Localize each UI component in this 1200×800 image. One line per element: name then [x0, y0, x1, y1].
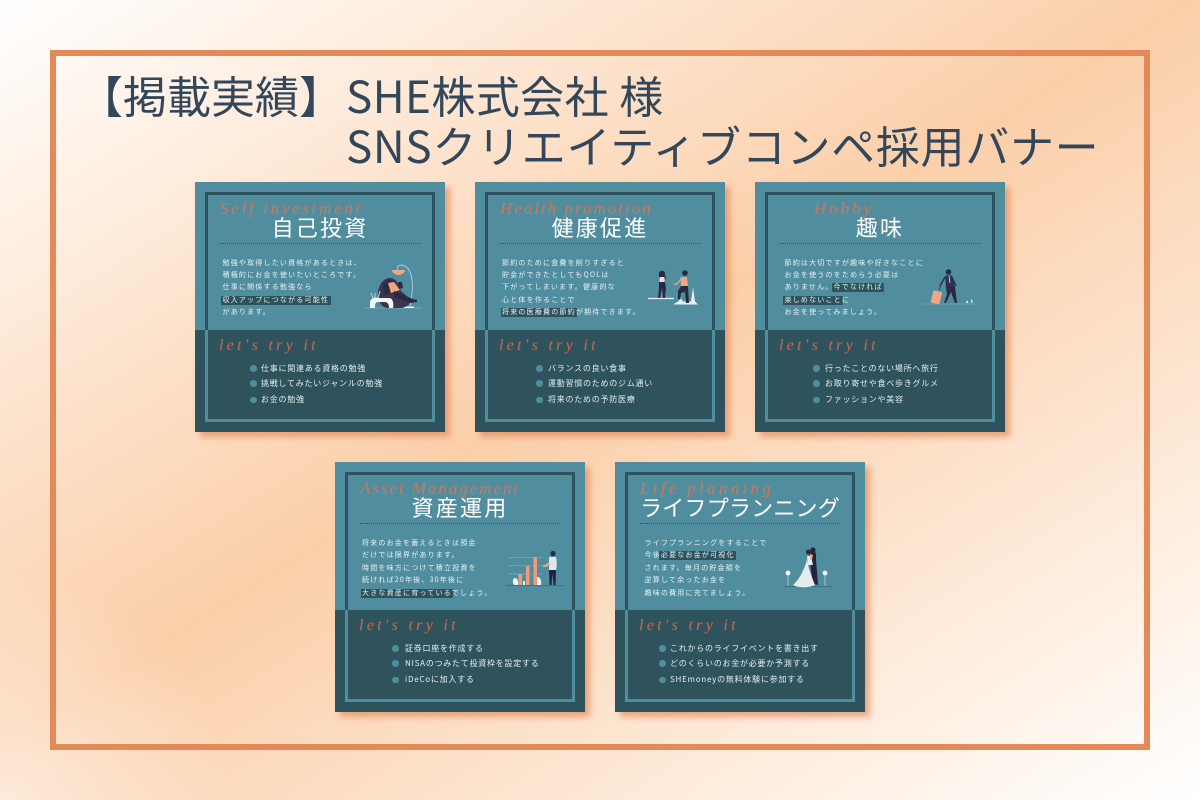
icon: two people exercising — [648, 270, 698, 304]
panel: health promotion — [475, 182, 725, 432]
icon: wedding couple — [785, 547, 832, 588]
body text — [644, 538, 767, 598]
panel: life planning — [615, 462, 865, 712]
panel: life planning: SHEmoneyの無料体験に参加する — [670, 674, 805, 685]
body text: お金を使うのをためらう必要は — [784, 270, 899, 280]
body text: 節約は大切ですが趣味や好きなことに — [784, 258, 924, 268]
body text: 貯金ができたとしてもQOLは — [502, 270, 609, 280]
body text: に — [842, 295, 850, 305]
panel: hobby: ファッションや美容 — [825, 394, 904, 405]
panel: life planning: これからのライフイベントを書き出す — [670, 642, 819, 654]
script: let's try it: let's try it — [779, 337, 879, 354]
checklist — [392, 642, 540, 685]
panel: health promotion: バランスの良い食事 — [548, 362, 627, 374]
body text: 心と体を作ることで — [502, 295, 576, 305]
body text: 収入アップにつながる可能性 — [222, 295, 329, 305]
body text: 仕事に関係する勉強なら — [222, 282, 313, 292]
checklist — [659, 642, 819, 685]
body text — [361, 538, 492, 598]
body text: 将来のお金を蓄えるときは預金 — [362, 538, 477, 548]
body text: ライフプランニングをすることで — [644, 538, 767, 548]
body text: されます。毎月の貯金額を — [644, 563, 742, 573]
heading: 資産運用 — [412, 491, 508, 523]
body text: があります。 — [222, 307, 271, 317]
body text: 大きな資産に育っている — [362, 588, 452, 598]
body text: 必要なお金が可視化 — [661, 550, 735, 560]
panel: asset management: 証券口座を作成する — [405, 642, 484, 654]
panel: self investment: 挑戦してみたいジャンルの勉強 — [261, 378, 383, 389]
panel: health promotion: 将来のための予防医療 — [548, 394, 636, 405]
panel: health promotion: 運動習慣のためのジム通い — [548, 378, 653, 389]
checklist — [813, 362, 939, 405]
script subtitle: Asset Management — [360, 479, 520, 498]
heading: 趣味 — [856, 211, 904, 243]
body text: 下がってしまいます。健康的な — [502, 282, 616, 292]
script subtitle: Hobby — [814, 199, 874, 218]
script subtitle: Health promotion — [500, 199, 653, 218]
body text: 勉強や取得したい資格があるときは、 — [222, 258, 362, 268]
body text — [221, 258, 362, 317]
panel: hobby: 行ったことのない場所へ旅行 — [825, 362, 939, 374]
script: let's try it: let's try it — [359, 617, 459, 634]
heading: 自己投資 — [272, 211, 368, 243]
panel: self investment: お金の勉強 — [261, 394, 305, 405]
icon: traveller with suitcase — [922, 269, 978, 304]
checklist — [536, 362, 653, 405]
body text: が期待できます。 — [576, 307, 641, 317]
body text: 続ければ20年後、30年後に — [362, 575, 464, 585]
title line 1: 【掲載実績】 — [79, 62, 343, 126]
script: let's try it: let's try it — [639, 617, 739, 634]
body text: 今後 — [644, 550, 661, 560]
panel: self investment — [195, 182, 445, 432]
body text: 今でなければ — [834, 282, 883, 292]
panel: asset management — [335, 462, 585, 712]
title line 3: banner description: SNSクリエイティブコンペ採用バナー — [346, 112, 1099, 176]
icon: bar chart with person — [506, 550, 564, 586]
panel: life planning: どのくらいのお金が必要か予測する — [670, 658, 810, 669]
body text: 将来の医療費の節約 — [502, 307, 576, 317]
body text: 楽しめないこと — [784, 295, 842, 305]
body text: 趣味の費用に充てましょう。 — [644, 588, 750, 598]
script: let's try it: let's try it — [499, 337, 599, 354]
script subtitle: Life planning — [640, 479, 774, 498]
panel: self investment: 仕事に関連ある資格の勉強 — [261, 362, 366, 374]
body text: 積極的にお金を使いたいところです。 — [222, 270, 361, 280]
script: let's try it: let's try it — [219, 337, 319, 354]
panel: hobby: お取り寄せや食べ歩きグルメ — [825, 378, 939, 389]
body text: でしょう。 — [452, 588, 492, 598]
title line 2: client name: SHE株式会社 様 — [346, 62, 664, 126]
body text: だけでは限界があります。 — [362, 550, 460, 560]
icon: person reading on bean bag — [364, 264, 422, 308]
body text — [501, 258, 641, 317]
body text: お金を使ってみましょう。 — [784, 307, 882, 317]
script subtitle: Self investment — [220, 199, 363, 218]
body text: 逆算して余ったお金を — [644, 575, 726, 585]
heading: 健康促進 — [552, 211, 648, 243]
body text: 節約のために食費を削りすぎると — [502, 258, 625, 268]
panel: hobby — [755, 182, 1005, 432]
panel: asset management: iDeCoに加入する — [405, 674, 475, 685]
body text: 時間を味方につけて積立投資を — [362, 563, 477, 573]
panel: asset management: NISAのつみたて投資枠を設定する — [405, 658, 540, 669]
body text: ありません。 — [784, 282, 834, 292]
body text — [783, 258, 924, 317]
checklist — [250, 362, 383, 405]
heading: ライフプランニング — [640, 491, 840, 523]
